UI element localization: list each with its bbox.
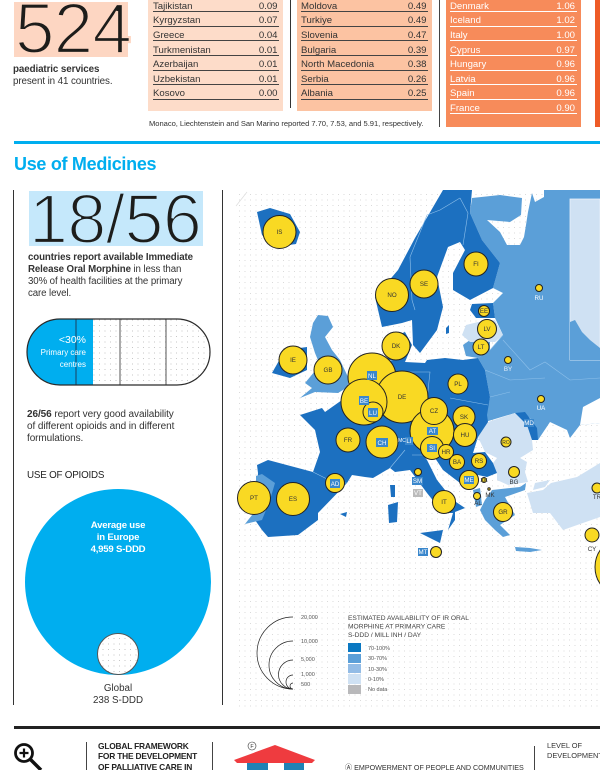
map: availability of IR oral morphine in Europe: SM xyxy=(413,478,422,485)
map: availability of IR oral morphine in Europe: BY xyxy=(504,366,512,373)
row xyxy=(450,42,577,56)
row: Greece xyxy=(153,30,184,41)
table: lowest values column xyxy=(148,0,283,111)
map: availability of IR oral morphine in Europe: AT xyxy=(429,428,436,435)
circle chart: use of opioids: Average use xyxy=(91,520,145,531)
caption: paediatric services xyxy=(13,64,99,75)
table: second column xyxy=(297,0,432,111)
colour legend: 0-10% xyxy=(368,677,384,683)
size legend: nested arcs: 10,000 xyxy=(301,639,318,645)
row: 1.00 xyxy=(556,30,575,41)
row: 0.07 xyxy=(259,15,278,26)
map: availability of IR oral morphine in Europe xyxy=(236,190,600,706)
row: 0.97 xyxy=(556,44,575,56)
country codes: MK xyxy=(485,492,496,499)
map: availability of IR oral morphine in Europe: MT xyxy=(419,549,428,556)
map: availability of IR oral morphine in Europe: CH xyxy=(378,440,386,447)
inset panel: eastern Russia xyxy=(570,199,600,360)
row xyxy=(301,42,428,56)
country codes: GR xyxy=(498,509,508,516)
row xyxy=(450,12,577,27)
text: level of development xyxy=(547,741,600,760)
caption xyxy=(13,64,112,87)
row: Turkiye xyxy=(301,15,332,26)
size legend: nested arcs: 500 xyxy=(301,682,310,688)
colour legend: 10-30% xyxy=(368,667,387,673)
text block: morphine availability xyxy=(28,252,193,299)
circle chart: use of opioids xyxy=(25,489,211,675)
country codes: HU xyxy=(461,432,469,439)
size legend: nested arcs: 20,000 xyxy=(301,615,318,621)
heading: Use of Medicines: Use of Medicines xyxy=(14,154,156,174)
row: Kosovo xyxy=(153,88,185,99)
map: availability of IR oral morphine in Europe: SI xyxy=(429,445,435,452)
country codes: LV xyxy=(483,326,491,333)
label: global use: 238 S-DDD xyxy=(93,694,143,706)
table: third column xyxy=(446,0,581,127)
row xyxy=(301,85,428,100)
country codes: CZ xyxy=(430,408,438,415)
text: level of development: LEVEL OF xyxy=(547,741,582,750)
row xyxy=(153,56,279,71)
panel: left statistics xyxy=(25,180,211,706)
country codes: NO xyxy=(387,292,397,299)
row: 0.25 xyxy=(408,88,426,99)
text block: opioid availability xyxy=(27,409,174,444)
row xyxy=(450,85,577,100)
row: 0.26 xyxy=(408,74,426,85)
row xyxy=(153,0,279,12)
country codes: FI xyxy=(473,261,479,268)
row: Uzbekistan xyxy=(153,74,200,85)
row: 0.96 xyxy=(556,88,575,99)
colour legend: ESTIMATED AVAILABILITY OF IR ORAL xyxy=(348,615,469,622)
country codes: SE xyxy=(420,281,428,288)
map: availability of IR oral morphine in Europe: RU xyxy=(535,295,543,302)
row xyxy=(450,27,577,41)
colour legend: 70-100% xyxy=(368,646,390,652)
row: Tajikistan xyxy=(153,1,192,12)
row: 1.06 xyxy=(556,1,575,12)
country codes: BG xyxy=(510,479,519,486)
map: availability of IR oral morphine in Europe: BE xyxy=(360,398,368,405)
country codes: RO xyxy=(502,440,510,446)
row xyxy=(450,100,577,114)
country codes: IT xyxy=(441,499,447,506)
row: France xyxy=(450,103,480,114)
text: global framework heading: GLOBAL FRAMEWORK xyxy=(98,741,189,751)
country codes: DE xyxy=(398,394,406,401)
pill chart: less than 30% primary care centres: centres xyxy=(60,360,86,369)
map: availability of IR oral morphine in Europe: MD xyxy=(524,420,534,427)
map: availability of IR oral morphine in Europe: ME xyxy=(464,477,474,484)
text block: opioid availability: of different opioids and in different xyxy=(27,421,174,432)
text: global framework heading xyxy=(98,741,198,770)
proportional circles by country xyxy=(238,216,600,597)
country codes: XK xyxy=(480,478,488,484)
subheading: use of opioids: USE OF OPIOIDS xyxy=(27,470,104,481)
row: Italy xyxy=(450,30,468,41)
country codes: IE xyxy=(290,357,296,364)
map: availability of IR oral morphine in Europe: LI xyxy=(406,438,412,445)
row: Albania xyxy=(301,88,333,99)
big stat 18/56: 18/56 xyxy=(29,180,201,258)
UK and Albania, mid blue xyxy=(300,315,482,507)
row: Turkmenistan xyxy=(153,44,211,56)
row: Latvia xyxy=(450,74,476,85)
row: Azerbaijan xyxy=(153,59,198,70)
size legend: nested arcs xyxy=(257,615,318,689)
map: availability of IR oral morphine in Europe: NL xyxy=(368,373,377,380)
country codes: DK xyxy=(392,343,401,350)
row: 0.04 xyxy=(259,30,278,41)
text block: morphine availability: care level. xyxy=(28,288,71,299)
row: 0.38 xyxy=(408,59,426,70)
row: 0.96 xyxy=(556,74,575,85)
row xyxy=(301,12,428,27)
map: availability of IR oral morphine in Europe: MC xyxy=(398,438,406,444)
row: 0.01 xyxy=(259,59,278,70)
map: availability of IR oral morphine in Europe: UA xyxy=(537,405,546,412)
row: 0.49 xyxy=(408,15,426,26)
country codes xyxy=(250,229,600,553)
text block: opioid availability: 26/56 report very good availability xyxy=(27,409,174,420)
row: Spain xyxy=(450,88,475,99)
country codes: FR xyxy=(344,437,353,444)
icon: framework house: F xyxy=(250,744,254,750)
row: 0.96 xyxy=(556,59,575,70)
row: 0.90 xyxy=(556,103,575,114)
country codes: EE xyxy=(480,308,488,315)
row xyxy=(450,0,577,12)
size legend: nested arcs: 1,000 xyxy=(301,672,315,678)
row xyxy=(301,56,428,71)
row: Kyrgyzstan xyxy=(153,15,200,26)
country codes: RS xyxy=(475,458,483,465)
row: 0.01 xyxy=(259,74,278,85)
eastern countries, mid blue xyxy=(463,190,600,552)
row xyxy=(153,71,279,85)
row: Cyprus xyxy=(450,44,480,56)
row: North Macedonia xyxy=(301,59,374,70)
row: 0.49 xyxy=(408,1,426,12)
row xyxy=(301,0,428,12)
circle chart: use of opioids: in Europe xyxy=(97,532,139,543)
row: 0.01 xyxy=(259,44,278,56)
icon: framework house xyxy=(234,742,315,770)
row: Serbia xyxy=(301,74,329,85)
big stat 18/56 xyxy=(29,191,203,246)
colour legend xyxy=(348,615,469,694)
label: global use: Global xyxy=(104,683,132,694)
row xyxy=(450,56,577,71)
row: Denmark xyxy=(450,1,489,12)
colour legend: MORPHINE AT PRIMARY CARE xyxy=(348,624,446,630)
row xyxy=(301,27,428,41)
row: 0.09 xyxy=(259,1,278,12)
row: 0.00 xyxy=(259,88,278,99)
light blue countries xyxy=(462,320,600,530)
icon: magnifier with plus xyxy=(14,743,42,770)
size legend: nested arcs: 5,000 xyxy=(301,657,315,663)
text: global framework heading: FOR THE DEVELOPMENT xyxy=(98,751,197,761)
country codes: HR xyxy=(442,449,451,456)
country codes: GB xyxy=(324,367,332,374)
pill chart: less than 30% primary care centres: <30% xyxy=(59,334,86,346)
row xyxy=(153,27,279,41)
country codes: PT xyxy=(250,495,258,502)
country codes: SK xyxy=(460,414,469,421)
label chips on circles xyxy=(330,371,534,556)
table: fourth column, cropped xyxy=(595,0,600,127)
country codes: IS xyxy=(277,229,282,236)
row xyxy=(153,12,279,27)
colour legend: S-DDD / MILL INH / DAY xyxy=(348,632,422,639)
map: availability of IR oral morphine in Europe: LU xyxy=(369,410,377,417)
row: Iceland xyxy=(450,15,481,26)
pill chart: less than 30% primary care centres: Primary care xyxy=(41,348,87,357)
row: Bulgaria xyxy=(301,44,336,56)
label: global use xyxy=(93,683,143,706)
colour legend: 30-70% xyxy=(368,656,387,662)
row: Moldova xyxy=(301,1,337,12)
western and central Europe, dark blue xyxy=(255,190,538,543)
Portugal, mid blue xyxy=(245,474,275,524)
text block: morphine availability: countries report available Immediate xyxy=(28,252,193,263)
text block: morphine availability: 30% of health facilities at the primary xyxy=(28,276,182,287)
big stat: 524 paediatric services xyxy=(13,0,131,87)
row: 0.39 xyxy=(408,44,426,56)
caption: present in 41 countries. xyxy=(13,76,112,87)
row xyxy=(450,71,577,85)
country codes: AL xyxy=(474,500,482,507)
country codes: PL xyxy=(454,381,462,388)
row xyxy=(153,42,279,56)
text block: morphine availability: Release Oral Morphine in less than xyxy=(28,264,181,275)
row: 0.47 xyxy=(408,30,426,41)
row: Hungary xyxy=(450,59,486,70)
country codes: ES xyxy=(289,496,297,503)
row xyxy=(301,71,428,85)
row xyxy=(153,85,279,100)
country codes: LT xyxy=(478,344,485,351)
text block: opioid availability: formulations. xyxy=(27,433,83,444)
row: 1.02 xyxy=(556,15,575,26)
circle chart: use of opioids: 4,959 S-DDD xyxy=(91,544,146,555)
row: Slovenia xyxy=(301,30,338,41)
colour legend: No data xyxy=(368,687,388,693)
map: availability of IR oral morphine in Europe: VT xyxy=(414,490,422,497)
pill chart: less than 30% primary care centres xyxy=(26,318,211,386)
map: availability of IR oral morphine in Europe: AD xyxy=(331,481,340,488)
footnote: Monaco, Liechtenstein and San Marino reported 7.70, 7.53, and 5.91, respectively. xyxy=(149,119,423,128)
country codes: CY xyxy=(588,546,596,553)
country codes: BA xyxy=(453,459,462,466)
